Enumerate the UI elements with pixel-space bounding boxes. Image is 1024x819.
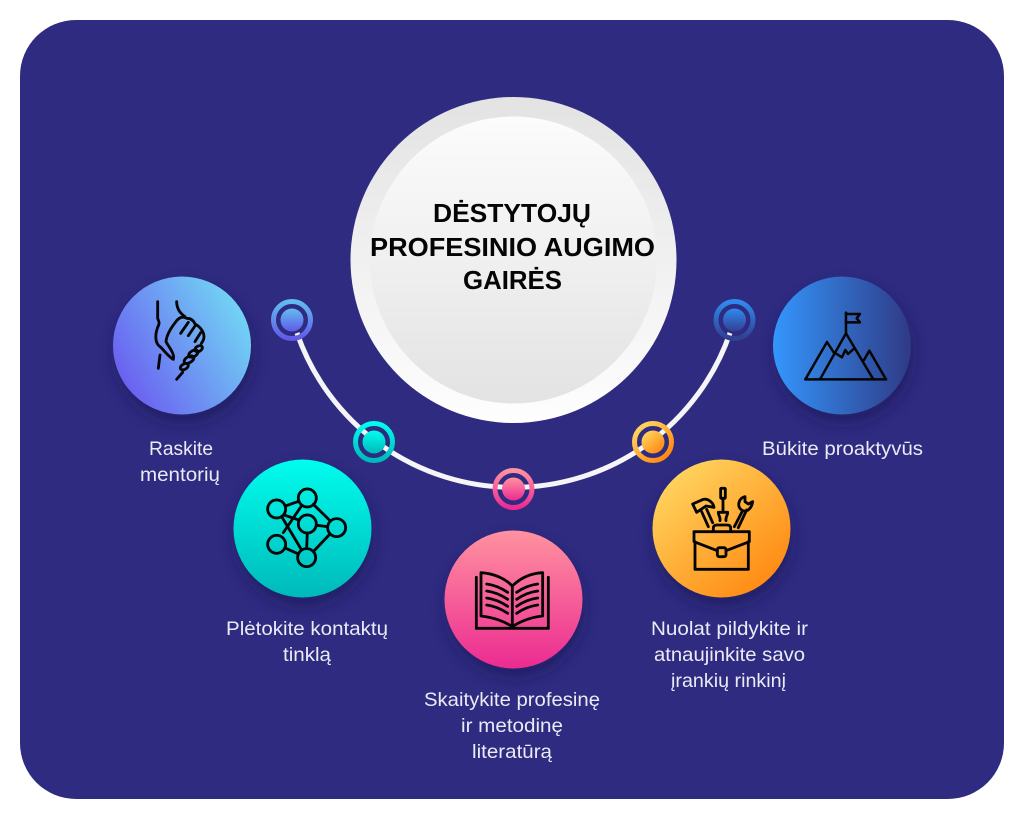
label: atnaujinkite savo bbox=[654, 644, 805, 666]
label: ir metodinę bbox=[461, 715, 563, 737]
icon: toolbox bbox=[693, 488, 753, 569]
label: Nuolat pildykite ir bbox=[651, 618, 809, 640]
icon: network bbox=[268, 489, 346, 567]
icon: mountain with flag bbox=[805, 313, 886, 379]
connecting arc bbox=[297, 333, 730, 487]
item: Nuolat pildykite ir atnaujinkite savo įrankių rinkinį bbox=[651, 460, 809, 692]
label: įrankių rinkinį bbox=[671, 670, 786, 692]
label: Raskite bbox=[149, 438, 213, 460]
title bbox=[370, 198, 655, 295]
label: tinklą bbox=[283, 644, 331, 666]
title: GAIRĖS bbox=[463, 265, 562, 295]
node 4 bbox=[634, 424, 672, 460]
item: Plėtokite kontaktų tinklą bbox=[226, 460, 388, 666]
item: Skaitykite profesinę ir metodinę literatūrą bbox=[424, 530, 600, 763]
node 5 bbox=[716, 302, 753, 338]
label: mentorių bbox=[140, 464, 220, 486]
node 2 bbox=[356, 424, 392, 460]
node 1 bbox=[274, 302, 310, 338]
icon: open book bbox=[476, 573, 548, 628]
item: Būkite proaktyvūs bbox=[762, 276, 923, 460]
label bbox=[651, 618, 809, 692]
label: literatūrą bbox=[472, 741, 552, 763]
node 3 bbox=[495, 470, 532, 508]
title: DĖSTYTOJŲ bbox=[433, 198, 591, 228]
label: Skaitykite profesinę bbox=[424, 689, 600, 711]
label bbox=[424, 689, 600, 763]
label: Būkite proaktyvūs bbox=[762, 438, 923, 460]
item: Raskite mentorių bbox=[113, 276, 252, 486]
label bbox=[226, 618, 388, 666]
central circle with title bbox=[350, 97, 676, 423]
title: PROFESINIO AUGIMO bbox=[370, 232, 655, 262]
icon: handshake bbox=[156, 302, 204, 379]
label: Plėtokite kontaktų bbox=[226, 618, 388, 640]
label bbox=[140, 438, 220, 486]
